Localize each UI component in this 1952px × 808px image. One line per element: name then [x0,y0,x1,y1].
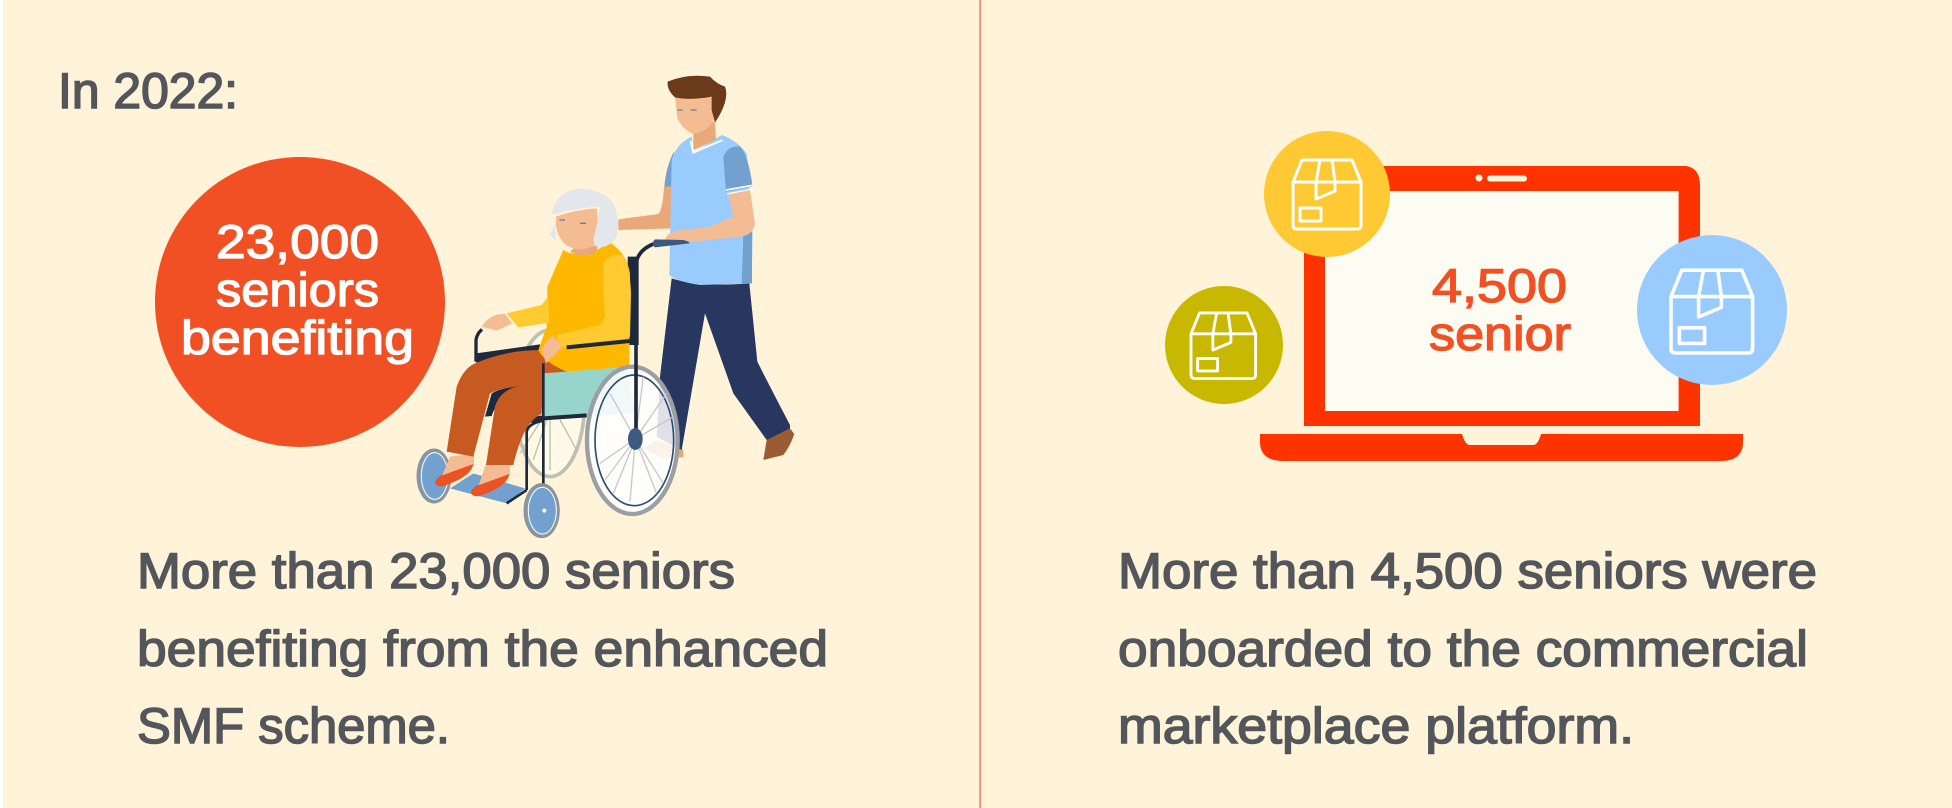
icon: blue parcel [1637,235,1787,385]
text block: SMF scheme description: More than 23,000 seniors [137,543,735,599]
icon: carer [618,76,794,460]
icon: senior woman [435,189,633,496]
text block: marketplace description: marketplace platform. [1118,698,1634,754]
illustration: carer pushing senior in wheelchair [418,76,794,537]
icon: yellow parcel [1264,131,1390,257]
label: 4,500 senior [1429,259,1571,360]
text block: SMF scheme description [137,543,828,754]
text block: marketplace description [1118,543,1817,754]
panel: seniors benefiting from SMF scheme [58,63,828,754]
panel: commercial marketplace platform [1118,131,1817,754]
text block: marketplace description: onboarded to the commercial [1118,621,1808,677]
callout: 23,000 seniors benefiting: seniors [216,263,379,316]
icon: front frame and right front wheel [525,363,558,537]
icon: footplate and left front wheel [418,450,527,503]
callout: 23,000 seniors benefiting: 23,000 [216,215,379,268]
label: 4,500 senior: 4,500 [1432,259,1567,312]
text block: SMF scheme description: SMF scheme. [137,698,450,754]
icon: far wheel [516,330,584,477]
callout: 23,000 seniors benefiting: benefiting [181,311,414,364]
callout: 23,000 seniors benefiting [155,157,445,447]
text block: SMF scheme description: benefiting from the enhanced [137,621,828,677]
text block: marketplace description: More than 4,500 seniors were [1118,543,1817,599]
icon: olive parcel [1165,286,1283,404]
icon: large wheel [587,239,689,514]
illustration: laptop [1260,166,1743,461]
label: 4,500 senior: senior [1429,307,1571,360]
heading: In 2022: In 2022: [58,63,238,119]
icon: wheelchair seat and back [476,257,639,423]
